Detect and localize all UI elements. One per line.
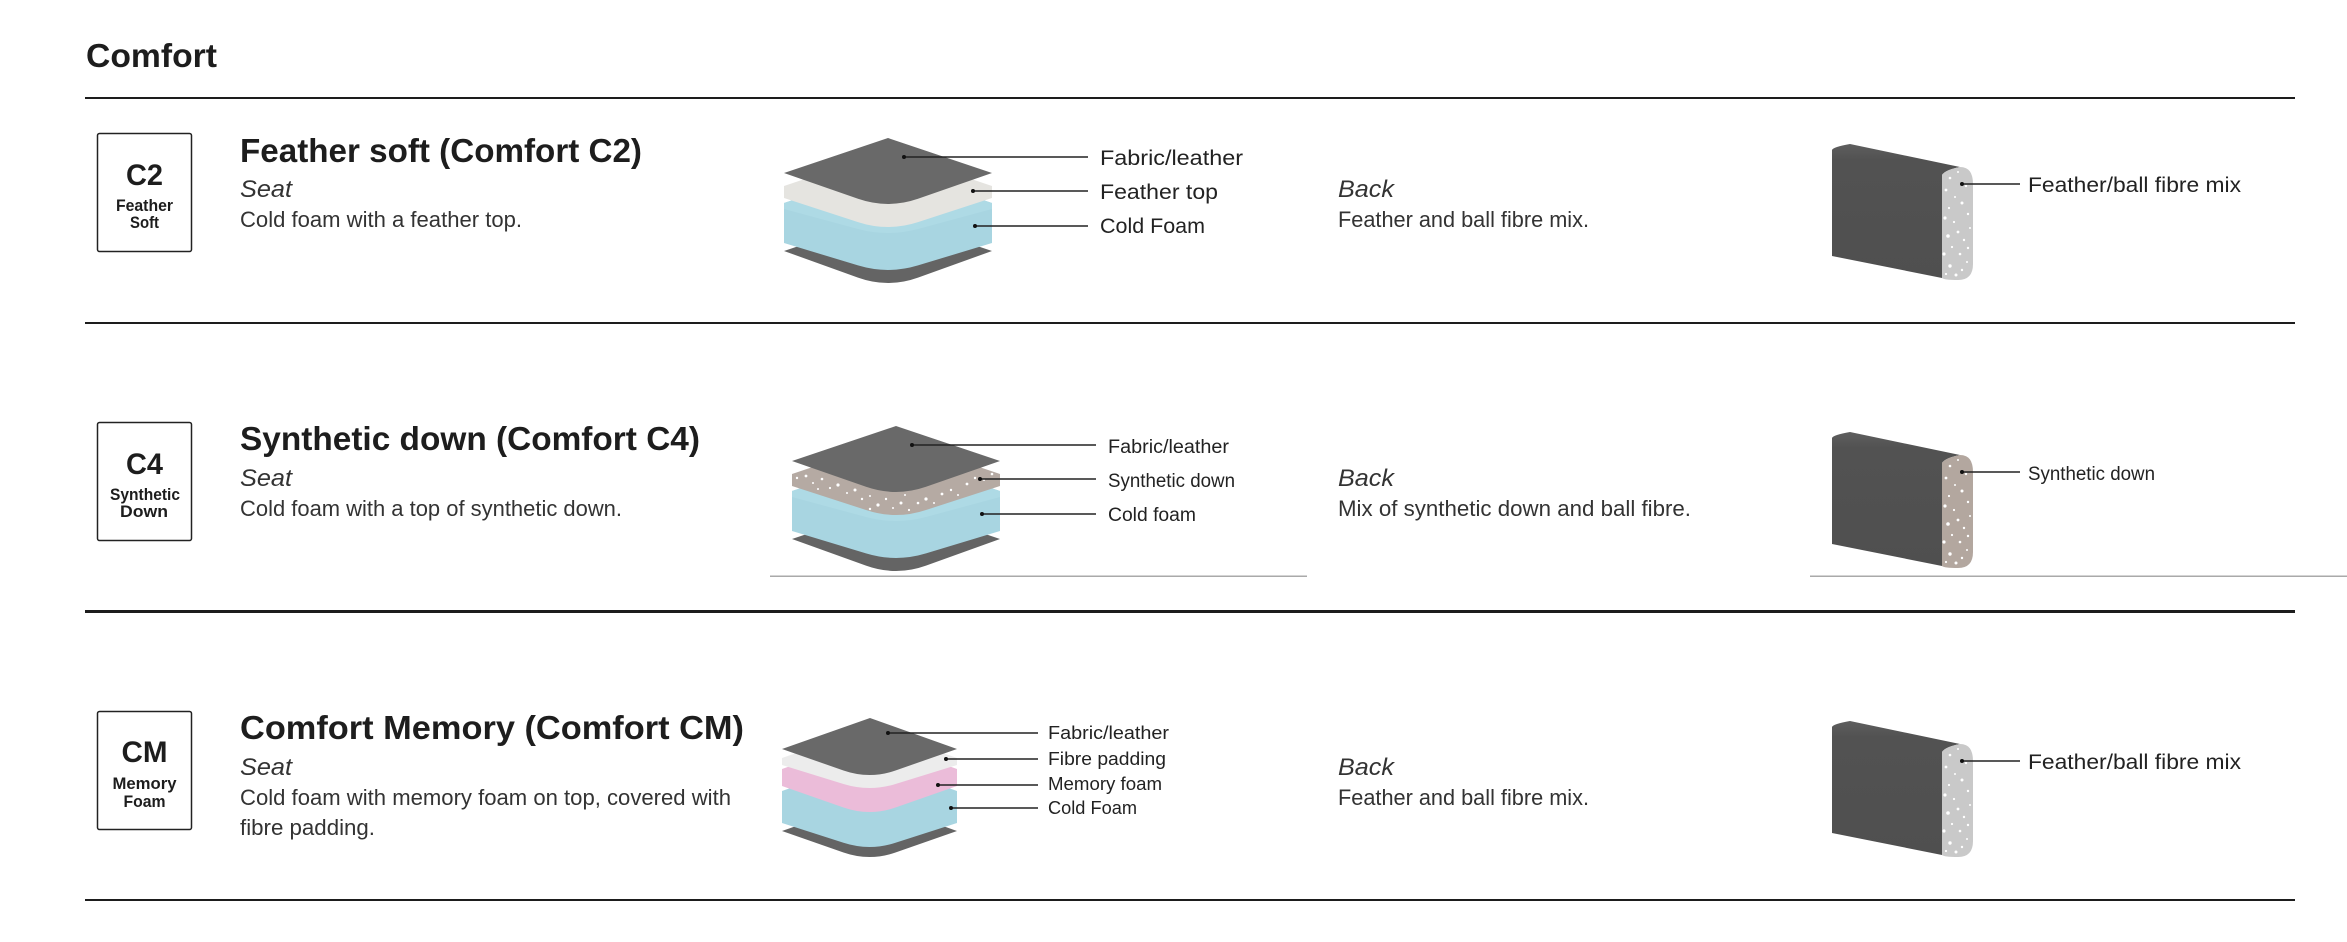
diagram: seat layers C2: Cold Foam bbox=[1100, 215, 1205, 238]
diagram: seat layers CM: Fibre padding bbox=[1048, 749, 1166, 769]
text block: back description bbox=[1338, 176, 1589, 232]
diagram: seat layers CM bbox=[782, 718, 1169, 857]
title: Comfort bbox=[86, 37, 217, 74]
badge: C2 Feather Soft: C2 bbox=[126, 159, 163, 192]
heading: Comfort Memory: Comfort Memory (Comfort CM) bbox=[240, 709, 744, 746]
diagram: seat layers CM: Memory foam bbox=[1048, 774, 1162, 794]
diagram: back cushion C4: Synthetic down bbox=[2028, 464, 2155, 485]
text block: back description bbox=[1338, 465, 1691, 521]
diagram: seat layers C2: Feather top bbox=[1100, 181, 1218, 204]
diagram: seat layers CM: Fabric/leather bbox=[1048, 723, 1169, 743]
text block: back description: Back bbox=[1338, 176, 1396, 203]
text block: seat description: Cold foam with a top of synthetic down. bbox=[240, 496, 622, 521]
diagram: seat layers C2: Fabric/leather bbox=[1100, 147, 1243, 170]
badge: C4 Synthetic Down: C4 bbox=[126, 448, 163, 481]
badge: CM Memory Foam: Memory bbox=[112, 774, 177, 793]
badge: CM Memory Foam: CM bbox=[122, 736, 168, 769]
badge: C2 Feather Soft: Soft bbox=[130, 213, 159, 232]
badge: C4 Synthetic Down: Down bbox=[120, 502, 168, 521]
panel: Synthetic down C4 row bbox=[98, 420, 2347, 577]
diagram: back cushion C2: Feather/ball fibre mix bbox=[2028, 174, 2242, 197]
text block: seat description: Seat bbox=[240, 754, 293, 781]
heading: Synthetic down: Synthetic down (Comfort C4) bbox=[240, 420, 700, 457]
text block: back description: Feather and ball fibre mix. bbox=[1338, 207, 1589, 232]
heading: Feather soft: Feather soft (Comfort C2) bbox=[240, 132, 642, 169]
text block: seat description: fibre padding. bbox=[240, 815, 375, 840]
text block: seat description bbox=[240, 754, 731, 840]
text block: seat description bbox=[240, 176, 522, 232]
diagram: seat layers C2 bbox=[784, 138, 1243, 283]
diagram: seat layers C4: Cold foam bbox=[1108, 505, 1196, 526]
panel: Comfort Memory CM row bbox=[98, 709, 2242, 857]
text block: back description: Back bbox=[1338, 754, 1396, 781]
text block: seat description: Cold foam with memory foam on top, covered with bbox=[240, 785, 731, 810]
diagram: seat layers C4: Fabric/leather bbox=[1108, 437, 1230, 458]
text block: back description: Back bbox=[1338, 465, 1396, 492]
diagram: seat layers C4: Synthetic down bbox=[1108, 471, 1235, 492]
badge: C4 Synthetic Down: Synthetic bbox=[110, 485, 180, 504]
diagram: back cushion CM bbox=[1832, 721, 2242, 857]
text block: seat description bbox=[240, 465, 622, 521]
text block: seat description: Seat bbox=[240, 465, 293, 492]
text block: back description: Mix of synthetic down and ball fibre. bbox=[1338, 496, 1691, 521]
badge: CM Memory Foam bbox=[98, 712, 192, 830]
panel: Feather soft C2 row bbox=[98, 132, 2242, 283]
text block: back description bbox=[1338, 754, 1589, 810]
diagram: seat layers CM: Cold Foam bbox=[1048, 798, 1137, 818]
text block: seat description: Cold foam with a feather top. bbox=[240, 207, 522, 232]
badge: C2 Feather Soft: Feather bbox=[116, 196, 173, 215]
badge: C4 Synthetic Down bbox=[98, 422, 192, 540]
badge: C2 Feather Soft bbox=[98, 134, 192, 252]
text block: back description: Feather and ball fibre mix. bbox=[1338, 785, 1589, 810]
diagram: back cushion C2 bbox=[1832, 144, 2242, 280]
text block: seat description: Seat bbox=[240, 176, 293, 203]
badge: CM Memory Foam: Foam bbox=[124, 792, 166, 811]
diagram: seat layers C4 bbox=[792, 426, 1235, 571]
diagram: back cushion C4 bbox=[1832, 432, 2155, 568]
diagram: back cushion CM: Feather/ball fibre mix bbox=[2028, 751, 2242, 774]
